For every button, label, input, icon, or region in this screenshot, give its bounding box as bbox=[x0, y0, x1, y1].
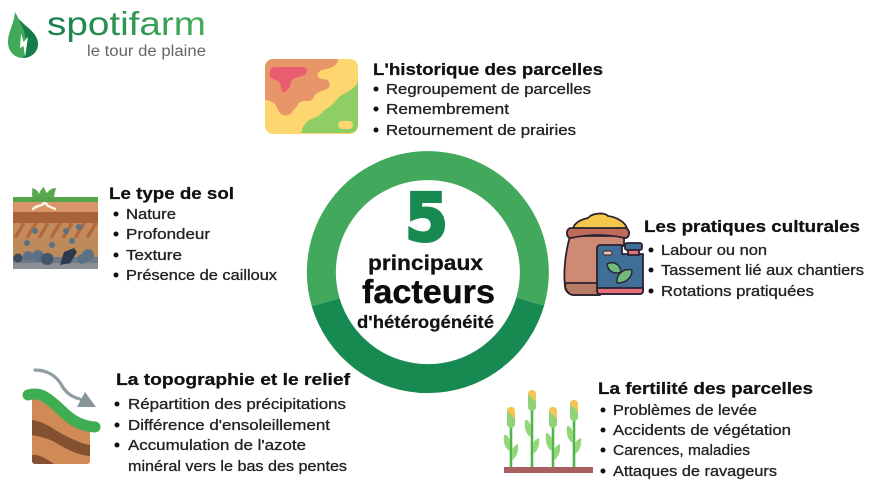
heading: La fertilité des parcelles bbox=[598, 379, 813, 398]
number 5: 5 bbox=[405, 180, 448, 256]
list bbox=[648, 243, 864, 300]
list: Tassement lié aux chantiers bbox=[661, 263, 864, 279]
list: Retournement de prairies bbox=[386, 123, 576, 139]
list: Accumulation de l'azote bbox=[128, 438, 306, 454]
central ring bbox=[321, 166, 534, 379]
central title bbox=[357, 180, 495, 332]
list: Labour ou non bbox=[661, 243, 767, 259]
icon: green leaf drop with lightning bbox=[8, 12, 38, 58]
list: Différence d'ensoleillement bbox=[128, 418, 330, 434]
list: Attaques de ravageurs bbox=[613, 464, 777, 480]
list bbox=[600, 403, 791, 480]
icon: soil layers bbox=[13, 187, 98, 269]
logo: spotifarm bbox=[8, 5, 206, 60]
list bbox=[374, 82, 591, 139]
icon: parcel map bbox=[265, 59, 358, 134]
list: Remembrement bbox=[386, 102, 509, 118]
list: Carences, maladies bbox=[613, 443, 750, 459]
list: Regroupement de parcelles bbox=[386, 82, 591, 98]
logo tagline: le tour de plaine bbox=[87, 43, 206, 60]
icon: corn plants bbox=[504, 390, 593, 473]
list: Accidents de végétation bbox=[613, 423, 791, 439]
panel: type de sol bbox=[13, 184, 278, 284]
logo wordmark: spotifarm bbox=[47, 5, 206, 42]
list: Nature bbox=[126, 207, 176, 223]
panel: fertilité des parcelles bbox=[504, 379, 813, 480]
heading: La topographie et le relief bbox=[116, 370, 350, 389]
panel: topographie et relief bbox=[28, 370, 350, 475]
heading: Le type de sol bbox=[109, 184, 234, 203]
panel: pratiques culturales bbox=[564, 214, 864, 300]
list: Problèmes de levée bbox=[613, 403, 757, 419]
list: Profondeur bbox=[126, 227, 210, 243]
d'hétérogénéité: d'hétérogénéité bbox=[357, 312, 494, 332]
icon: slope with arrow bbox=[28, 370, 96, 464]
list: Répartition des précipitations bbox=[128, 397, 346, 413]
list: Présence de cailloux bbox=[126, 268, 278, 284]
list: Texture bbox=[126, 248, 182, 264]
facteurs: facteurs bbox=[362, 273, 495, 310]
heading: L'historique des parcelles bbox=[373, 60, 603, 79]
list bbox=[114, 397, 347, 475]
principaux: principaux bbox=[368, 252, 483, 275]
panel: historique des parcelles bbox=[265, 59, 603, 139]
heading: Les pratiques culturales bbox=[644, 217, 860, 236]
list: minéral vers le bas des pentes bbox=[128, 459, 347, 475]
icon: seed bag and canister bbox=[564, 214, 643, 295]
list: Rotations pratiquées bbox=[661, 284, 814, 300]
list bbox=[114, 207, 278, 284]
